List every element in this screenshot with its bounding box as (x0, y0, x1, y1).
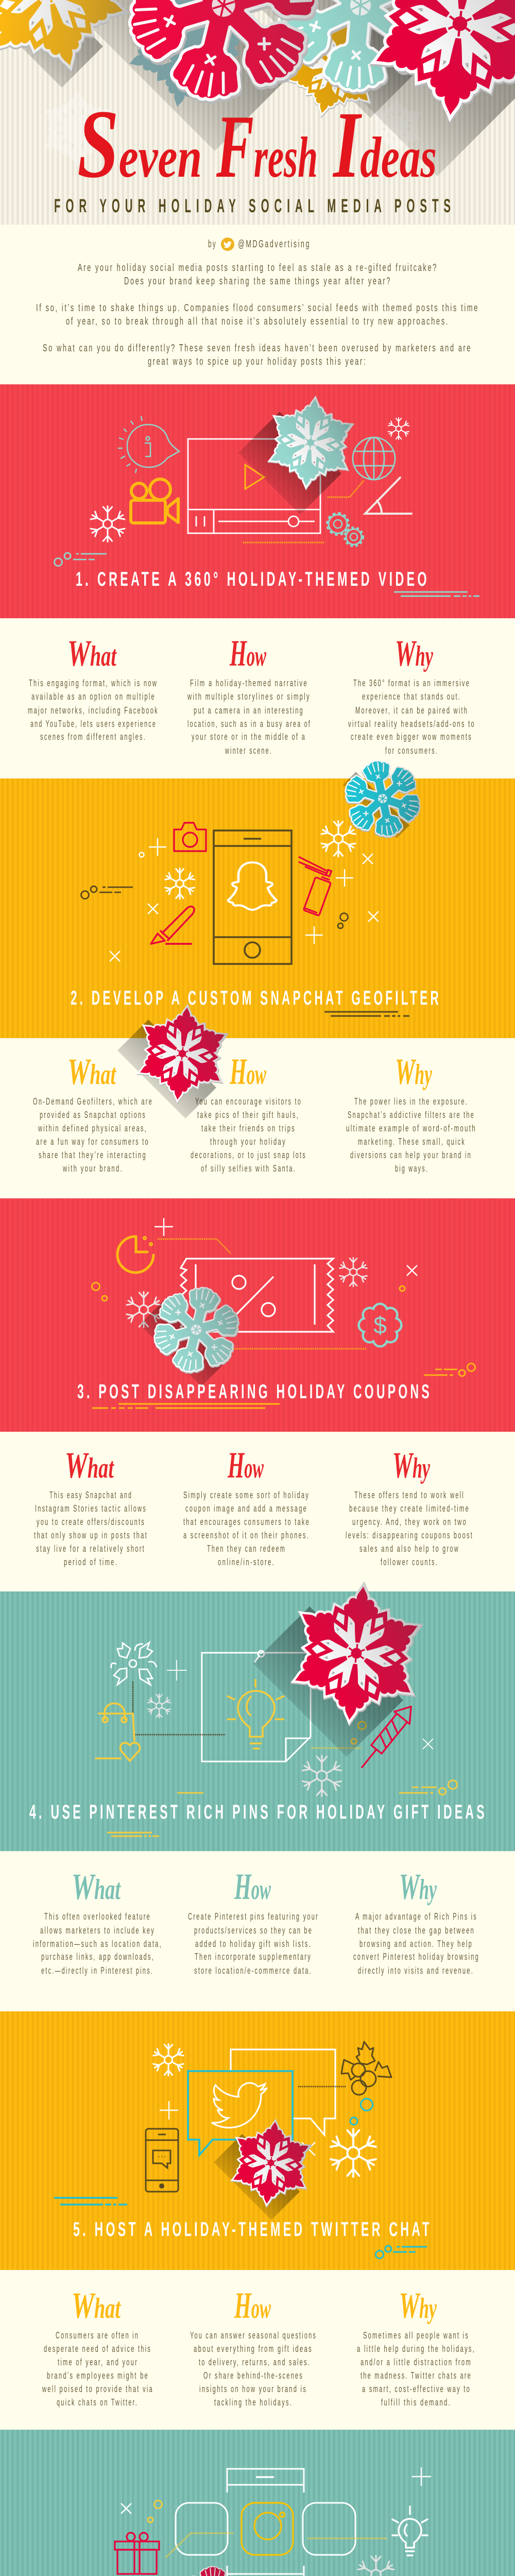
intro text (36, 262, 479, 367)
column: how: You can encourage visitors to (195, 1096, 302, 1107)
icon: line snowflake (321, 821, 356, 857)
accent: circles and dashes (376, 2246, 427, 2259)
icon: twitter bird (212, 2083, 267, 2128)
accent: underline (394, 592, 479, 596)
title: Ideas (333, 92, 437, 198)
panel: idea 6 (0, 2430, 515, 2576)
column: how: products/services so they can be (194, 1925, 313, 1936)
column: what: you to create offers/discounts (37, 1517, 145, 1527)
icon: circles (350, 2099, 373, 2125)
column: how: How (234, 2285, 271, 2326)
icon: light bulb (227, 1679, 284, 1749)
accent: underline (324, 1012, 409, 1016)
sparkles (110, 838, 379, 961)
icon: movie camera (131, 479, 178, 523)
icon: globe (353, 437, 395, 480)
column: how: store location/e-commerce data. (194, 1965, 312, 1976)
column: why: follower counts. (381, 1557, 438, 1567)
column: how: a screenshot of it on their phones. (183, 1530, 310, 1540)
panel: idea 3 (0, 1198, 515, 1567)
icon: coupon ticket (181, 1259, 333, 1332)
column: why: big ways. (395, 1163, 428, 1174)
column: how: tackling the holidays. (214, 2397, 293, 2408)
icon: cyan paper snowflake (317, 733, 448, 864)
byline: by (208, 239, 217, 250)
column: how: Film a holiday-themed narrative (190, 678, 308, 688)
column: how: location, such as in a busy area of (187, 719, 311, 729)
column: what (33, 1866, 162, 1976)
dotted connectors (166, 2533, 387, 2557)
column: what: period of time. (64, 1557, 118, 1567)
column: how: your store or in the middle of a (192, 732, 306, 742)
sparkles (121, 2467, 431, 2514)
icon: line snowflake (90, 506, 125, 542)
byline (208, 238, 311, 251)
icon: white speech bubble (231, 2049, 335, 2135)
accent: underline (92, 1404, 280, 1408)
column: how (188, 1866, 319, 1976)
icon: video player (188, 439, 320, 533)
column: how: online/in-store. (218, 1557, 275, 1567)
icon: red paper snowflake (214, 2108, 325, 2220)
icon: circles (351, 1722, 366, 1744)
column: what: information—such as location data, (33, 1939, 162, 1949)
column: what: share that they’re interacting (39, 1150, 147, 1160)
dotted line (243, 542, 324, 543)
column: how (190, 2285, 317, 2408)
column: how: with multiple storylines or simply (187, 691, 311, 702)
column: how: decorations, or to just snap lots (191, 1150, 306, 1160)
column: how: Then they can redeem (207, 1544, 286, 1554)
column: why (346, 1445, 473, 1567)
column: why: Why (399, 1866, 437, 1907)
icon: circles (92, 1283, 405, 1301)
column: how (183, 1445, 310, 1567)
panel: header (0, 0, 515, 225)
column: what: What (67, 1051, 116, 1092)
icon: dollar badge (359, 1304, 401, 1346)
column: what: allows marketers to include key (40, 1925, 155, 1936)
icon: dollar badge: $ (373, 1312, 387, 1338)
column: how: added to holiday gift wish lists. (195, 1939, 312, 1949)
column: how: Simply create some sort of holiday (183, 1490, 310, 1500)
column: what: that only show up in posts that (34, 1530, 148, 1540)
column: what: with your brand. (62, 1163, 123, 1174)
icon: camera (174, 823, 206, 851)
column: why: Why (395, 633, 434, 674)
column: how: Create Pinterest pins featuring your (188, 1911, 319, 1922)
column: how: to delivery, returns, and sales. (199, 2357, 311, 2367)
icon: gift box (115, 2533, 159, 2574)
icon: snapchat ghost (228, 862, 277, 910)
column: what: within defined physical areas, (38, 1123, 147, 1133)
column: what: etc.—directly in Pinterest pins. (41, 1965, 153, 1976)
icon: rocket (354, 1700, 419, 1774)
icon: spray can (299, 857, 331, 916)
accent: underline (107, 1833, 159, 1836)
column: what: This often overlooked feature (44, 1911, 151, 1922)
icon: red chunky snowflake (83, 0, 364, 145)
icon: line snowflake (126, 1292, 161, 1328)
column: how (187, 633, 311, 756)
accent: circles and dashes (81, 886, 133, 899)
icon: line snowflake (357, 2556, 394, 2576)
icon: grey-blue snowflake (115, 0, 266, 120)
title: Fresh (216, 96, 318, 196)
sparkles (154, 1218, 417, 1276)
icon: gears (327, 513, 363, 546)
sparkles (160, 2101, 315, 2156)
icon: shopping bag with heart (96, 1703, 140, 1761)
icon: holly (341, 2042, 391, 2095)
column: what: What (72, 2285, 121, 2326)
column: why: Why (399, 2285, 437, 2326)
column: how: How (227, 1445, 264, 1486)
icon: carousel tiles (176, 2503, 355, 2555)
icon: cyan speech bubble (188, 2071, 293, 2155)
column: what: scenes from different angles. (40, 732, 146, 742)
column: what: available as an option on multiple (31, 691, 156, 702)
column: why: Why (395, 1051, 433, 1092)
column: what: major networks, including Facebook (28, 705, 159, 716)
accent: circles and dashes (55, 553, 107, 566)
dotted line (158, 1239, 231, 1253)
icon: holly ring (111, 1642, 157, 1685)
icon: red paper snowflake (117, 992, 244, 1118)
icon: line snowflake (339, 1258, 368, 1286)
column: why: for consumers. (385, 745, 438, 756)
title: Seven (77, 90, 202, 198)
column: what (28, 633, 159, 742)
title (77, 90, 437, 198)
column: what: Consumers are often in (56, 2330, 139, 2341)
column: how: of silly selfies with Santa. (201, 1163, 296, 1174)
column: what (34, 1445, 148, 1567)
column: how: How (234, 1866, 271, 1907)
icon: craft knife (151, 906, 194, 944)
icon: red paper snowflake (253, 1565, 444, 1757)
column: why: fulfill this demand. (381, 2397, 451, 2408)
column: how: through your holiday (210, 1137, 286, 1147)
icon: small snowflake (147, 1694, 171, 1718)
icon: play triangle (245, 465, 264, 489)
icon: clock (117, 1236, 153, 1273)
icon: info bubble (118, 416, 179, 473)
column: how: Or share behind-the-scenes (203, 2370, 303, 2381)
column: what: brand’s employees might be (47, 2370, 149, 2381)
column: why: Why (392, 1445, 431, 1486)
panel: idea 2 (0, 733, 515, 1174)
column: how: winter scene. (225, 745, 272, 756)
column: why (348, 633, 475, 756)
column: how: about everything from gift ideas (194, 2344, 313, 2354)
column: how: take their friends on trips (201, 1123, 296, 1133)
column: what (33, 1051, 153, 1174)
column: what: What (67, 633, 117, 674)
icon: line snowflake (153, 2044, 184, 2076)
accent: underline (54, 2198, 127, 2205)
icon: phone frame (227, 2469, 304, 2576)
icon: red fancy snowflake (339, 0, 515, 145)
column: what: quick chats on Twitter. (57, 2397, 138, 2408)
column: what: On-Demand Geofilters, which are (33, 1096, 153, 1107)
column: what: and YouTube, lets users experience (30, 719, 157, 729)
dotted connectors (133, 1682, 225, 1735)
icon: line snowflake (302, 1756, 342, 1796)
column: what: This easy Snapchat and (49, 1490, 132, 1500)
dotted line (298, 2086, 346, 2087)
byline: @MDGadvertising (238, 239, 311, 250)
accent: circles and dashes (424, 1363, 475, 1376)
icon: teal paper snowflake (133, 1267, 259, 1393)
column: how: insights on how your brand is (199, 2384, 307, 2394)
panel: idea 4 (0, 1565, 515, 1976)
column: how: put a camera in an interesting (194, 705, 304, 716)
icon: teal snowflake (248, 0, 473, 117)
accent: circles and dashes (177, 1781, 457, 1795)
column: how: that encourages consumers to take (183, 1517, 310, 1527)
column: why (357, 2285, 475, 2408)
panel: introduction (36, 238, 479, 367)
column: how: How (229, 633, 266, 674)
icon: note document (202, 1651, 311, 1761)
column: how: take pics of their gift hauls, (197, 1110, 299, 1120)
panel: idea 1 (0, 384, 515, 756)
column: what: are a fun way for consumers to (36, 1137, 149, 1147)
column: what: time of year, and your (58, 2357, 138, 2367)
column: how (191, 1051, 306, 1174)
column: how: How (229, 1051, 266, 1092)
icon: smartphone (146, 2129, 178, 2192)
column: what: stay live for a relatively short (36, 1544, 145, 1554)
icon: red paper snowflake (170, 2559, 255, 2576)
column: what (42, 2285, 153, 2408)
column: why (353, 1866, 479, 1976)
dotted line (312, 1748, 360, 1749)
column: what: provided as Snapchat options (40, 1110, 146, 1120)
dotted connector (328, 480, 364, 497)
icon: light bulb (392, 2506, 427, 2555)
icon: small snowflake (388, 418, 409, 439)
icon: bubbles (338, 913, 348, 928)
column: what: This engaging format, which is now (29, 678, 158, 688)
icon: line snowflake (330, 2129, 377, 2177)
column: what: purchase links, app downloads, (41, 1952, 154, 1962)
dotted line (233, 1348, 366, 1349)
column: how: coupon image and add a message (185, 1503, 307, 1514)
icon: teal paper snowflake (238, 385, 368, 515)
column: how: Then incorporate supplementary (195, 1952, 312, 1962)
icon: yellow snowflake (0, 0, 178, 122)
icon: line snowflake (165, 868, 195, 899)
column: what: What (72, 1866, 121, 1907)
column: what: What (65, 1445, 114, 1486)
icon: circles (148, 2501, 162, 2522)
icon: instagram (242, 2503, 293, 2555)
column: what: desperate need of advice this (44, 2344, 151, 2354)
sparkles (167, 1660, 433, 1749)
column: what: well poised to provide that via (42, 2384, 153, 2394)
icon: gold snowflake (264, 0, 405, 138)
column: what: Instagram Stories tactic allows (35, 1503, 147, 1514)
column: how: You can answer seasonal questions (190, 2330, 317, 2341)
icon: angle (365, 478, 411, 514)
icon: phone (214, 831, 291, 964)
column: why (346, 1051, 476, 1174)
intro text: great ways to spice up your holiday posts this year: (148, 356, 367, 367)
panel: idea 5 (0, 2011, 515, 2408)
